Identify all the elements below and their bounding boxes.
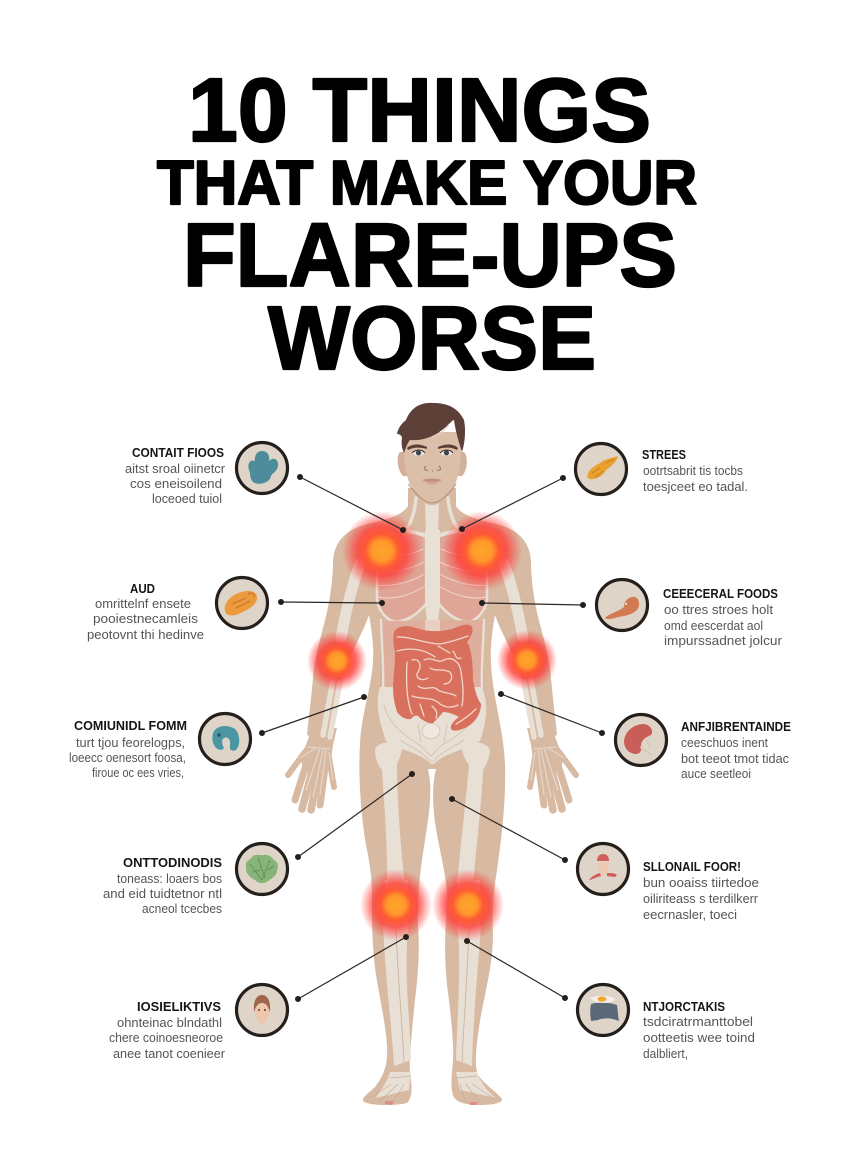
knee bones bbox=[385, 880, 480, 930]
icon: red kidney bbox=[616, 714, 666, 766]
description: ootrtsabrit tis tocbs bbox=[643, 464, 743, 478]
description: auce seetleoi bbox=[681, 767, 751, 781]
description bbox=[643, 1015, 755, 1061]
heading: STREES bbox=[642, 448, 686, 462]
panel: sllonail foor bbox=[578, 844, 759, 922]
body silhouette bbox=[307, 488, 557, 1105]
heading: ONTTODINODIS bbox=[123, 856, 222, 870]
description: ohnteinac blndathl bbox=[117, 1016, 222, 1030]
description: omrittelnf ensete bbox=[95, 597, 191, 611]
description: ootteetis wee toind bbox=[643, 1031, 755, 1045]
description: chere coinoesneoroe bbox=[109, 1031, 223, 1045]
icon: green lettuce bbox=[236, 844, 288, 894]
head bbox=[397, 403, 467, 503]
heading: SLLONAIL FOOR! bbox=[643, 860, 741, 874]
panel: aud bbox=[87, 578, 268, 642]
description: acneol tcecbes bbox=[142, 902, 222, 916]
panel: anfjibrentainde bbox=[616, 714, 791, 781]
description bbox=[125, 462, 225, 506]
human body figure bbox=[288, 403, 576, 1105]
icon: face bbox=[236, 984, 288, 1036]
description: bun ooaiss tiirtedoe bbox=[643, 876, 759, 890]
description: oiliriteass s terdilkerr bbox=[643, 892, 758, 906]
description bbox=[664, 603, 782, 648]
description: oo ttres stroes holt bbox=[664, 603, 774, 617]
abdomen wall bbox=[380, 620, 484, 690]
description: loceoed tuiol bbox=[152, 492, 222, 506]
description: bot teeot tmot tidac bbox=[681, 752, 789, 766]
description bbox=[87, 597, 204, 642]
heading: IOSIELIKTIVS bbox=[137, 1000, 221, 1014]
title: 10 THINGS bbox=[188, 61, 651, 161]
icon: orange piece bbox=[576, 444, 626, 494]
description: aitst sroal oiinetcr bbox=[125, 462, 225, 476]
femurs and leg bones bbox=[366, 742, 496, 1105]
description bbox=[69, 736, 186, 780]
title: FLARE-UPS bbox=[183, 206, 677, 306]
heading: CONTAIT FIOOS bbox=[132, 446, 224, 460]
inflammation glows bbox=[307, 511, 557, 941]
title: WORSE bbox=[268, 289, 596, 389]
neck and collar bones bbox=[408, 498, 457, 535]
panel: ntjorctakis bbox=[578, 984, 755, 1061]
lungs and ribcage bbox=[376, 530, 488, 632]
description: pooiestnecamleis bbox=[93, 612, 198, 626]
heading: NTJORCTAKIS bbox=[643, 1000, 725, 1014]
glow: right shoulder bbox=[442, 511, 522, 591]
pelvis bbox=[378, 687, 486, 764]
description: turt tjou feorelogps, bbox=[76, 736, 185, 750]
glow: left elbow bbox=[307, 631, 367, 691]
description: omd eescerdat aol bbox=[664, 619, 763, 633]
glow: left knee bbox=[360, 869, 432, 941]
panel: strees bbox=[576, 444, 748, 494]
description bbox=[681, 736, 789, 781]
description: impurssadnet jolcur bbox=[664, 634, 782, 648]
description bbox=[109, 1016, 225, 1061]
title bbox=[157, 61, 697, 389]
heading: COMIUNIDL FOMM bbox=[74, 719, 187, 733]
description: toesjceet eo tadal. bbox=[643, 480, 748, 494]
description: toneass: loaers bos bbox=[117, 872, 222, 886]
icon: teal leaf bbox=[236, 442, 288, 494]
panel: iosielkitvs bbox=[109, 984, 288, 1061]
heading: AUD bbox=[130, 582, 155, 596]
glow: left shoulder bbox=[342, 511, 422, 591]
description: and eid tuidtetnor ntl bbox=[103, 887, 222, 901]
description: eecrnasler, toeci bbox=[643, 908, 737, 922]
icon: person bbox=[578, 844, 628, 894]
foot bones bbox=[366, 1072, 496, 1105]
glow: right elbow bbox=[497, 630, 557, 690]
description: anee tanot coenieer bbox=[113, 1047, 225, 1061]
icon: teal swirl bbox=[200, 714, 250, 764]
description: tsdciratrmanttobel bbox=[643, 1015, 753, 1029]
leader lines bbox=[259, 474, 605, 1002]
heading: ANFJIBRENTAINDE bbox=[681, 720, 791, 734]
description: firoue oc ees vries, bbox=[92, 766, 184, 780]
panel: ontrodinodis bbox=[103, 844, 288, 916]
panel: contait fioos bbox=[125, 442, 288, 506]
description bbox=[103, 872, 222, 916]
description: cos eneisoilend bbox=[130, 477, 222, 491]
description: ceeschuos inent bbox=[681, 736, 769, 750]
description bbox=[643, 876, 759, 922]
description: dalbliert, bbox=[643, 1047, 688, 1061]
hands bbox=[288, 728, 576, 810]
title: THAT MAKE YOUR bbox=[157, 149, 697, 218]
description bbox=[643, 464, 748, 494]
icon: orange food bbox=[216, 578, 268, 628]
panel: ceeeceral foods bbox=[596, 580, 782, 648]
description: peotovnt thi hedinve bbox=[87, 628, 204, 642]
icon: salmon meat bbox=[596, 580, 648, 630]
description: loeecc oenesort foosa, bbox=[69, 751, 186, 765]
icon: egg and gray cloth bbox=[578, 984, 628, 1036]
heading: CEEECERAL FOODS bbox=[663, 587, 778, 601]
arm bones bbox=[323, 564, 541, 737]
intestines bbox=[393, 625, 481, 731]
glow: right knee bbox=[432, 869, 504, 941]
panel: comiunidl fomm bbox=[69, 714, 250, 780]
